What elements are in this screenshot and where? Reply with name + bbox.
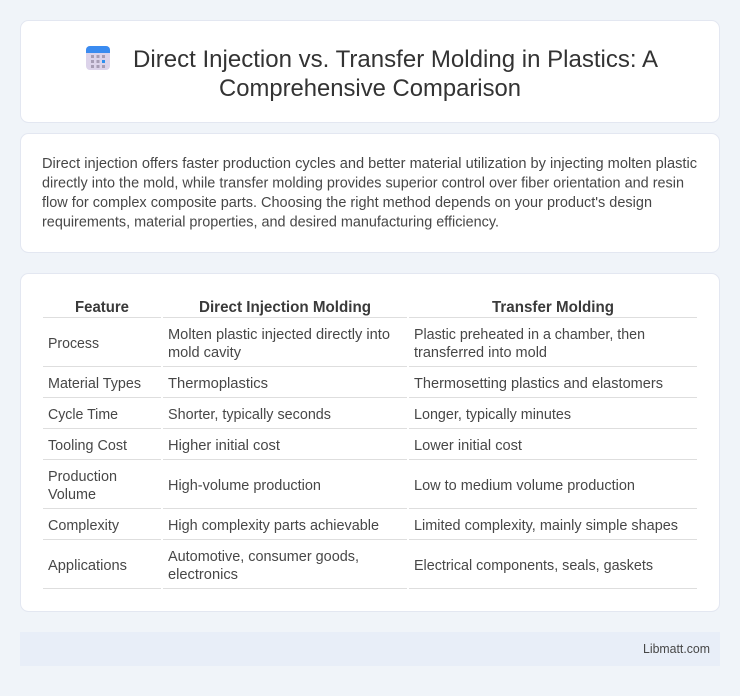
row: process: Plastic preheated in a chamber, then [414, 326, 645, 343]
text block: summary paragraph [42, 155, 697, 230]
row: cycle time [48, 406, 571, 423]
row: applications: Electrical components, seals, gaskets [414, 557, 653, 574]
text block: summary paragraph: Direct injection offers faster production cycles and better material utilization by injecting molten plastic [42, 155, 697, 172]
row: process: Molten plastic injected directly into [168, 326, 390, 343]
table header: Transfer Molding [492, 299, 614, 316]
row: process [48, 326, 645, 361]
row: material types: Thermosetting plastics and elastomers [414, 375, 663, 392]
table header: Direct Injection Molding [199, 299, 371, 316]
row: cycle time: Cycle Time [48, 406, 118, 423]
row: process: mold cavity [168, 344, 241, 361]
text block: summary paragraph: directly into the mold, while transfer molding provides superior control over fiber orientation and resin [42, 174, 684, 192]
row: complexity: Complexity [48, 517, 119, 534]
row: production volume: Volume [48, 486, 96, 503]
title [133, 46, 659, 102]
row: process: Process [48, 335, 99, 352]
table header: Feature [75, 299, 129, 316]
row: tooling cost: Higher initial cost [168, 437, 281, 454]
row: tooling cost [48, 437, 523, 454]
row: process: transferred into mold [414, 344, 547, 361]
row: tooling cost: Lower initial cost [414, 437, 523, 454]
row: material types: Material Types [48, 375, 141, 392]
row: material types [48, 375, 663, 392]
row: production volume: Low to medium volume production [414, 477, 635, 494]
row: complexity: High complexity parts achievable [168, 517, 379, 534]
table header [75, 299, 614, 316]
row: complexity: Limited complexity, mainly simple shapes [414, 517, 678, 534]
panel: title card [20, 20, 720, 122]
row: applications: Applications [48, 557, 127, 574]
row: applications [48, 548, 653, 583]
row: tooling cost: Tooling Cost [48, 437, 128, 454]
row: production volume: High-volume production [168, 477, 321, 494]
text block: summary paragraph: flow for complex composite parts. Choosing the right method depends on your product's design [42, 194, 652, 211]
text block: summary paragraph: requirements, material properties, and desired manufacturing efficiency. [42, 214, 499, 230]
icon: calendar [86, 46, 110, 70]
title: Comprehensive Comparison [219, 75, 521, 102]
title: Direct Injection vs. Transfer Molding in Plastics: A [133, 46, 659, 73]
footer [20, 632, 720, 666]
panel: comparison table [20, 274, 720, 612]
row: applications: electronics [168, 566, 238, 583]
row: production volume: Production [48, 468, 117, 485]
row: material types: Thermoplastics [168, 375, 268, 392]
row: cycle time: Longer, typically minutes [414, 406, 571, 423]
panel: summary [20, 134, 720, 252]
row: complexity [48, 517, 678, 534]
row: applications: Automotive, consumer goods, [168, 548, 359, 565]
footer: Libmatt.com [643, 642, 710, 656]
row: cycle time: Shorter, typically seconds [168, 406, 331, 423]
row: production volume [48, 468, 635, 503]
